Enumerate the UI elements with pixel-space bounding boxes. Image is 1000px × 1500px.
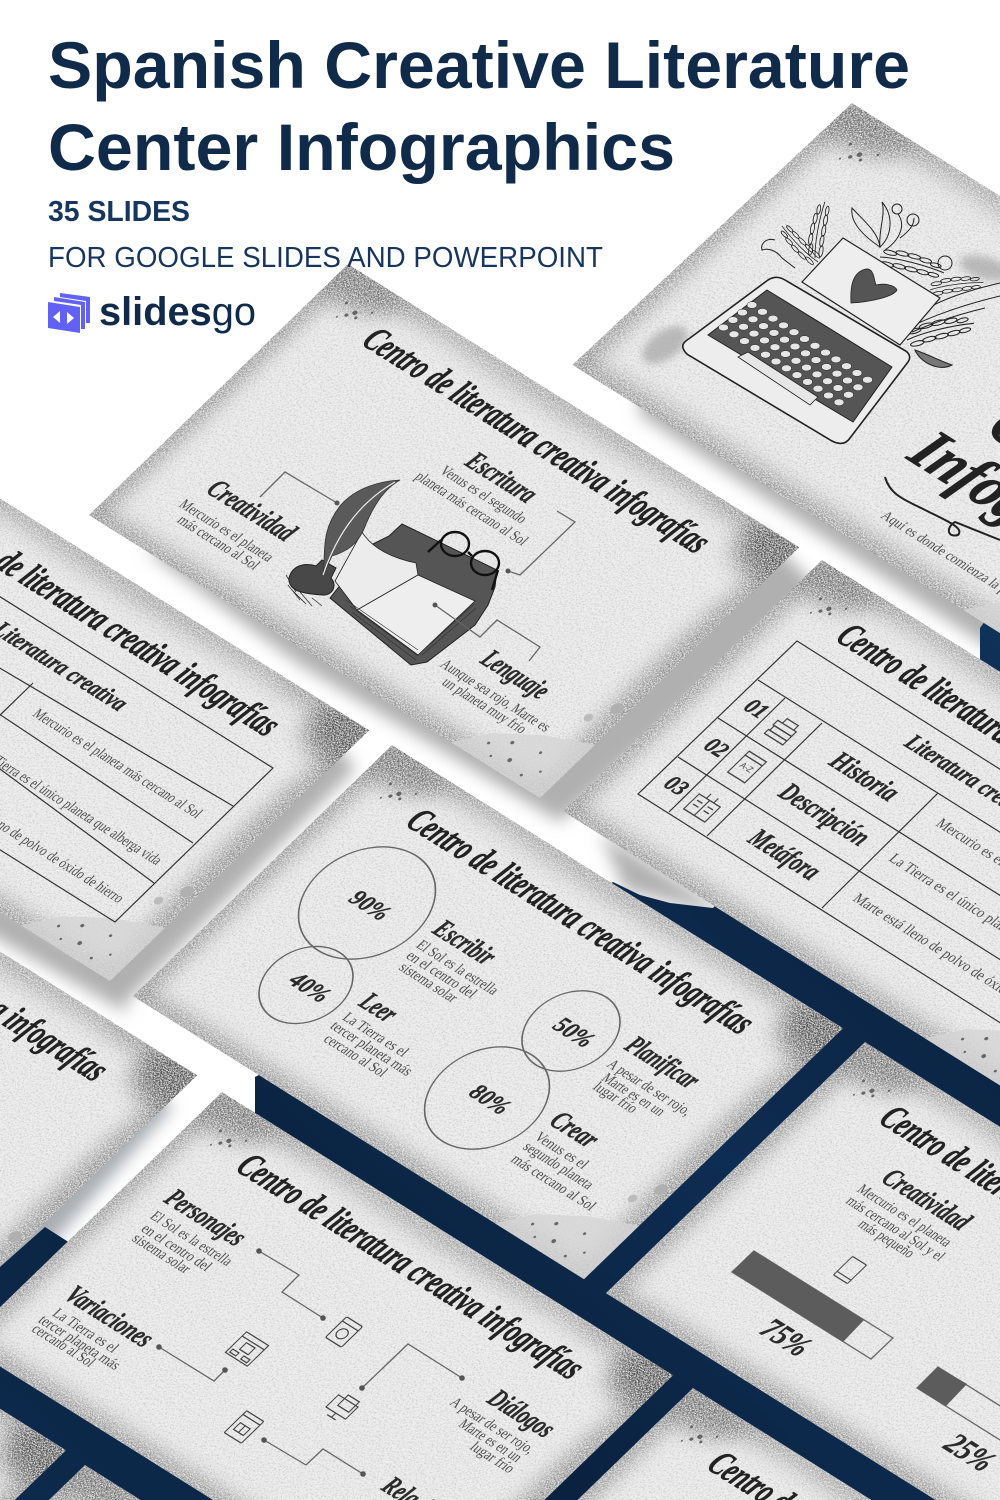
item: Escribir: Escribir	[426, 913, 504, 971]
item: Personajes: Personajes	[157, 1183, 254, 1251]
glasses	[428, 532, 499, 590]
item: Personajes: El Sol es la estrella	[146, 1209, 236, 1270]
item: Planificar: Planificar	[618, 1030, 708, 1094]
table row text: Mercurio es el planeta más cercano al Sol	[29, 706, 206, 822]
item: Variaciones: Variaciones	[58, 1280, 162, 1353]
circle: 40%	[240, 932, 372, 1038]
icon: dictionary: A-Z	[737, 760, 756, 774]
slide paper	[0, 752, 252, 1351]
item: Leer: cercano al Sol	[319, 1031, 391, 1080]
item: Crear: segundo planeta	[519, 1139, 598, 1193]
callout: Creatividad	[173, 472, 340, 573]
slide title: Centro de literatura creativa infografías	[228, 1145, 595, 1386]
row numbers	[659, 694, 775, 800]
item: Variaciones: tercer planeta más	[34, 1313, 124, 1373]
item: Escribir: El Sol es la estrella	[412, 938, 502, 999]
slide title: Centro de literatura creativa infografías	[398, 800, 765, 1041]
item: Creatividad: Creatividad	[875, 1163, 979, 1236]
item: Leer: tercer planeta más	[326, 1019, 416, 1079]
panel: progress bars slide	[564, 1002, 1000, 1500]
space bar	[738, 352, 818, 405]
item: Creatividad: más pequeño	[854, 1217, 918, 1261]
item: Escribir	[395, 913, 504, 1006]
feather	[323, 480, 400, 575]
page edge lines	[346, 600, 476, 660]
item: Planificar: lugar frío	[589, 1079, 641, 1117]
slide drop shadows	[0, 370, 1000, 1330]
heading: Creatividad	[200, 474, 304, 547]
icon: desktop computer	[322, 1391, 362, 1423]
item: Variaciones	[27, 1280, 162, 1373]
slide paper	[0, 406, 424, 1006]
slide title: Centro de literatura creativa infografías	[354, 319, 721, 560]
panel: connectors and icons slide	[0, 1052, 728, 1500]
open book pages	[335, 532, 418, 610]
item: Creatividad	[842, 1163, 979, 1265]
heart	[851, 269, 897, 303]
table grid	[0, 534, 273, 922]
item: Diálogos: A pesar de ser rojo,	[446, 1395, 538, 1457]
item: Planificar: Marte es en un	[597, 1070, 669, 1120]
keyboard	[708, 290, 892, 422]
description: un planeta muy frío	[438, 675, 530, 737]
ink hatch	[286, 575, 322, 606]
description: planeta más cercano al Sol	[411, 469, 531, 549]
wordmark: slidesgo	[99, 290, 256, 334]
circle: 80%	[399, 1027, 575, 1169]
panel: bottom-left slide	[0, 1424, 591, 1500]
inkwell	[289, 560, 336, 595]
icon: tablet	[325, 1317, 363, 1347]
item: Personajes: en el centro del	[137, 1221, 215, 1275]
connector	[260, 472, 337, 503]
callout: Escritura	[411, 446, 575, 575]
illustration: typewriter	[683, 200, 1000, 443]
panel: quill and book slide	[46, 224, 854, 823]
row numbers: 02	[699, 733, 735, 762]
description: más cercano al Sol	[173, 513, 263, 573]
description: Mercurio es el planeta	[175, 497, 278, 565]
item: Escribir: sistema solar	[395, 960, 461, 1006]
icon: tablet with gift	[224, 1411, 264, 1443]
bar: 75%: 75%	[753, 1312, 819, 1363]
item: Personajes	[128, 1183, 254, 1277]
connector dot	[334, 500, 340, 506]
circle: 50%	[502, 976, 640, 1086]
slide paper	[0, 1052, 728, 1500]
item: Diálogos: Marte es en un	[454, 1416, 526, 1466]
main title: Center Infographics	[48, 110, 675, 184]
item: Variaciones: La Tierra es el	[48, 1306, 122, 1356]
item: Crear: más cercano al Sol	[507, 1152, 599, 1214]
item: Diálogos	[446, 1383, 563, 1477]
circle: 80%: 80%	[463, 1080, 516, 1120]
item: Creatividad: más cercano al Sol y el	[842, 1193, 948, 1265]
connector	[508, 511, 575, 575]
circle: 50%: 50%	[547, 1013, 600, 1053]
subtitle: FOR GOOGLE SLIDES AND POWERPOINT	[48, 242, 603, 274]
slide paper	[46, 224, 854, 823]
item: Leer: La Tierra es el	[338, 1010, 412, 1060]
icon: dictionary	[728, 751, 766, 783]
item: Crear: Crear	[543, 1105, 607, 1153]
item: Leer: Leer	[352, 986, 406, 1028]
slide paper	[392, 1348, 1000, 1500]
header block	[48, 28, 910, 334]
bar: 25%	[917, 1367, 1000, 1478]
connector	[435, 605, 540, 661]
row descriptions	[849, 816, 1000, 1028]
icon: stack of books	[764, 716, 801, 745]
panel: right table slide	[520, 520, 1000, 1119]
circle: 90%: 90%	[343, 886, 396, 926]
logo: slidesgo	[48, 290, 256, 334]
callout: Lenguaje	[432, 602, 558, 737]
item: Planificar	[589, 1030, 708, 1120]
main title: Spanish Creative Literature	[48, 28, 910, 102]
row numbers: 01	[739, 694, 775, 723]
keys	[718, 302, 872, 406]
item: Planificar: A pesar de ser rojo,	[603, 1057, 695, 1119]
slide paper	[564, 1002, 1000, 1500]
item: Creatividad: Mercurio es el planeta	[853, 1182, 956, 1250]
table row text	[0, 706, 206, 906]
typewriter body	[683, 277, 910, 443]
panel: lower-left corner slide	[0, 1126, 121, 1500]
heading: Escritura	[458, 446, 545, 508]
main title	[48, 28, 910, 184]
foliage	[762, 200, 1000, 367]
icon: book	[833, 1256, 867, 1284]
item: Crear: Venus es el	[530, 1129, 592, 1173]
row labels	[741, 745, 907, 885]
icon: notebook checklist	[684, 789, 725, 822]
panel: typewriter cover slide	[527, 60, 1000, 697]
panel: percent circles slide	[90, 704, 898, 1304]
swoosh underline	[885, 477, 1000, 540]
description: Aunque sea rojo, Marte es	[436, 657, 554, 735]
circle: 40%: 40%	[282, 967, 336, 1008]
item: Diálogos: lugar frío	[466, 1439, 518, 1477]
navy background shape	[0, 600, 1000, 1500]
slide paper	[527, 60, 1000, 697]
icon: stacked slides	[48, 293, 90, 333]
row labels: Descripción	[772, 777, 878, 851]
row numbers: 03	[659, 771, 695, 800]
row labels: Metáfora	[741, 823, 828, 885]
description: Venus es el segundo	[436, 463, 531, 527]
slide paper	[90, 704, 898, 1304]
bar: 75%	[732, 1251, 893, 1363]
books	[330, 524, 497, 665]
illustration: quill, ink and books	[286, 480, 499, 665]
icon: web page	[225, 1332, 269, 1366]
circle: 90%	[270, 826, 464, 980]
paper sheet	[802, 238, 940, 345]
panel: left table slide	[0, 406, 424, 1006]
item: Personajes: sistema solar	[128, 1231, 194, 1277]
item: Crear	[507, 1105, 607, 1214]
connector lines	[156, 1248, 465, 1477]
heading: Lenguaje	[474, 644, 558, 704]
ink blots	[636, 251, 1000, 371]
item: Escribir: en el centro del	[402, 948, 480, 1002]
row labels: Historia	[822, 745, 907, 807]
item: Diálogos: Diálogos	[480, 1383, 563, 1443]
connector dot	[506, 568, 510, 574]
slide paper	[520, 520, 1000, 1119]
table grid	[638, 641, 1000, 1034]
slide count: 35 SLIDES	[48, 196, 190, 228]
connector dot	[432, 602, 438, 608]
item: Variaciones: cercano al Sol	[27, 1321, 99, 1370]
item: Leer	[319, 986, 416, 1080]
